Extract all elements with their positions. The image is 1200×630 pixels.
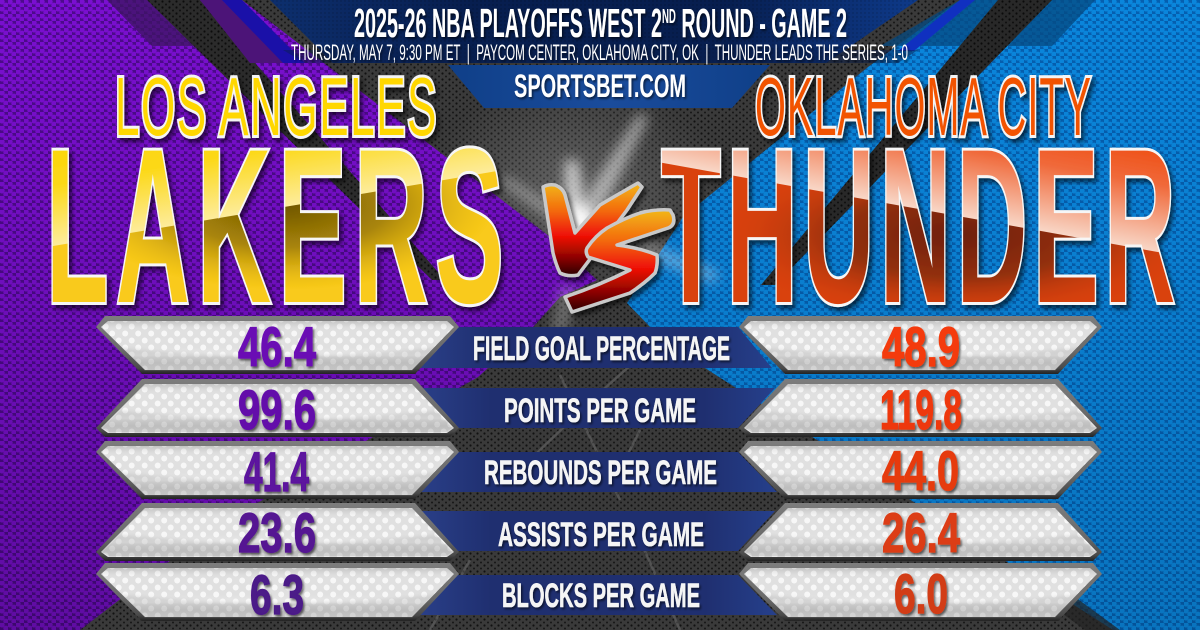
thunder rebounds per game value: 44.0 [882,439,959,502]
thunder stat panel row 1 [739,316,1102,374]
header title: ND [662,6,676,28]
lakers stat panel row 3 [96,441,459,499]
stat label: field goal percentage: FIELD GOAL PERCENTAGE [473,330,730,368]
thunder stat panel row 2 [739,379,1102,437]
thunder stat panel row 5 [739,563,1102,621]
thunder blocks per game value: 6.0 [894,562,948,625]
lakers stat panel row 2 [96,379,459,437]
stat ribbon: rebounds per game [420,452,777,492]
lakers field goal percentage value: 46.4 [238,315,316,378]
sportsbet label: SPORTSBET.COM [514,68,686,104]
lakers assists per game value: 23.6 [238,501,316,564]
light rays behind versus badge [500,112,720,335]
stat label: assists per game: ASSISTS PER GAME [498,516,704,554]
stat ribbon: assists per game [420,511,775,551]
versus badge [543,183,674,312]
lakers rebounds per game value: 41.4 [244,440,309,503]
dark stripe bottom right [1048,597,1120,630]
thunder assists per game value: 26.4 [882,501,960,564]
panel: blue leather side [627,0,1200,630]
team name: Los Angeles: LOS ANGELES [115,60,438,153]
diagonal stripes top left [107,0,445,280]
versus letter S [565,210,674,312]
header title: 2025-26 NBA PLAYOFFS WEST 2 [354,0,993,46]
thunder points per game value: 119.8 [880,378,962,441]
panel: purple leather side [0,0,597,630]
thunder stat panel row 3 [739,441,1102,499]
lakers stat panel row 1 [96,316,459,374]
stat label: rebounds per game: REBOUNDS PER GAME [484,454,717,492]
diagonal stripes top right [761,0,1095,285]
text: LAKERS [46,103,511,349]
stat label: points per game: POINTS PER GAME [504,392,696,430]
thunder field goal percentage value: 48.9 [882,315,960,378]
text: ROUND - GAME 2 [676,0,847,46]
thunder stat panel row 4 [739,503,1102,561]
lakers stat panel row 4 [96,503,459,561]
background: faint court lines [430,340,680,630]
stat label: blocks per game: BLOCKS PER GAME [502,577,700,615]
header banner [270,0,918,63]
background: centre highlight glow [400,60,750,320]
stat ribbon: field goal percentage [420,327,772,368]
stat ribbon: points per game [420,388,775,428]
sportsbet banner [448,65,770,108]
lakers stat panel row 5 [96,563,459,621]
lakers blocks per game value: 6.3 [250,563,304,626]
lakers points per game value: 99.6 [238,378,316,441]
versus letter V [543,183,642,276]
stat ribbon: blocks per game [420,575,777,615]
